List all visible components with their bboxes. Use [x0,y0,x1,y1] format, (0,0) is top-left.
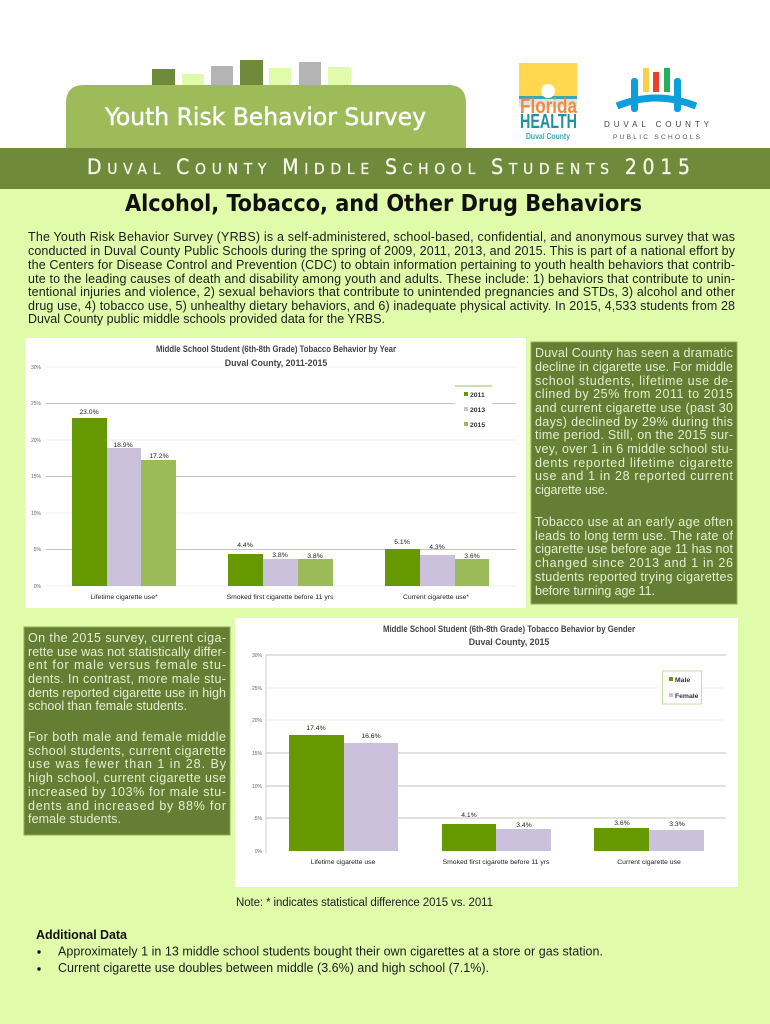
chart: tobacco behavior by gender: 10% [252,784,263,790]
intro paragraph [28,230,736,326]
chart: tobacco behavior by gender: Middle School Student (6th-8th Grade) Tobacco Behavior by Gender [383,624,636,634]
chart: tobacco behavior by year: 17.2% [149,453,169,460]
chart: tobacco behavior by gender: 0% [255,849,263,855]
chart: tobacco behavior by gender [235,618,738,887]
panel: male versus female: school than female students. [28,699,187,713]
main heading: Alcohol, Tobacco, and Other Drug Behaviors [125,189,642,217]
logo: Duval County Public Schools [604,68,710,141]
panel: decline in cigarette use: changed since 2013 and 1 in 26 [535,556,733,570]
chart: tobacco behavior by year: 2013 [470,407,485,414]
panel: decline in cigarette use: before turning age 11. [535,584,655,598]
chart: tobacco behavior by gender: 3.4% [516,822,532,829]
panel: decline in cigarette use: students reported trying cigarettes [535,570,733,584]
panel: decline in cigarette use: Duval County has seen a dramatic [535,346,733,360]
chart: tobacco behavior by gender: Duval County, 2015 [469,637,549,647]
panel: decline in cigarette use: school students, lifetime use de- [535,374,733,388]
chart: tobacco behavior by year: 15% [31,474,42,480]
chart: tobacco behavior by year: Duval County, 2011-2015 [225,358,327,368]
logo: Duval County Public Schools: DUVAL COUNTY [604,120,710,129]
chart: tobacco behavior by year: 3.6% [464,553,480,560]
panel: male versus female: rette use was not statistically differ- [28,645,226,659]
chart: tobacco behavior by year: 20% [31,438,42,444]
chart: tobacco behavior by year: Lifetime cigarette use* [90,594,158,601]
survey title tab: Youth Risk Behavior Survey [104,103,426,131]
chart: tobacco behavior by year: 5.1% [394,539,410,546]
chart: tobacco behavior by year: 10% [31,511,42,517]
chart: tobacco behavior by year: 5% [34,547,42,553]
panel: male versus female [24,627,230,835]
chart: tobacco behavior by gender: Smoked first cigarette before 11 yrs [443,859,550,866]
intro paragraph: Duval County public middle schools provided data for the YRBS. [28,312,385,326]
additional data: Additional Data [36,928,128,942]
banner: Duval County Middle School Students 2015 [0,148,770,189]
panel: decline in cigarette use: decline in cigarette use. For middle [535,360,733,374]
intro paragraph: tentional injuries and violence, 2) sexual behaviors that contribute to unintended pregnancies and STDs, 3) alcohol and other [28,285,735,299]
chart: tobacco behavior by gender: 3.6% [614,820,630,827]
panel: decline in cigarette use: and current cigarette use (past 30 [535,401,733,415]
additional data [36,928,603,975]
chart: tobacco behavior by year: Current cigarette use* [403,594,469,601]
chart: tobacco behavior by gender: 20% [252,718,263,724]
panel: male versus female: dents reported cigarette use in high [28,686,226,700]
panel: decline in cigarette use: Tobacco use at an early age often [535,515,733,529]
additional data: Current cigarette use doubles between middle (3.6%) and high school (7.1%). [58,961,489,975]
chart: tobacco behavior by gender: 4.1% [461,812,477,819]
additional data: Approximately 1 in 13 middle school students bought their own cigarettes at a store or gas station. [58,944,603,958]
chart: tobacco behavior by gender: 16.6% [361,733,381,740]
panel: decline in cigarette use: days) declined by 29% during this [535,415,733,429]
panel: male versus female: dents and increased by 88% for [28,799,226,813]
chart: tobacco behavior by year: Middle School Student (6th-8th Grade) Tobacco Behavior by Year [156,344,397,354]
chart: tobacco behavior by gender: 15% [252,751,263,757]
chart: tobacco behavior by gender: Female [675,693,699,700]
chart: tobacco behavior by year: 2011 [470,392,485,399]
panel: male versus female: school students, current cigarette [28,744,226,758]
logo: Florida Health Duval County [519,63,577,141]
chart: tobacco behavior by year: 18.9% [113,442,133,449]
panel: male versus female: increased by 103% for male stu- [28,785,226,799]
logo: Florida Health Duval County: Florida [520,95,577,118]
chart: tobacco behavior by gender: 17.4% [306,725,326,732]
chart: tobacco behavior by year: 2015 [470,422,485,429]
chart: tobacco behavior by gender: Lifetime cigarette use [311,859,376,866]
panel: decline in cigarette use: leads to long term use. The rate of [535,529,734,543]
chart: tobacco behavior by year: 4.3% [429,544,445,551]
chart: tobacco behavior by gender: Current cigarette use [617,859,681,866]
panel: male versus female: use was fewer than 1 in 28. By [28,757,227,771]
panel: decline in cigarette use: cigarette use before age 11 has not [535,542,734,556]
panel: decline in cigarette use [531,342,737,604]
chart: tobacco behavior by gender: 3.3% [669,821,685,828]
intro paragraph: ute to the leading causes of death and disability among youth and adults. These include: 1) behaviors that contribute to unin- [28,272,735,286]
panel: male versus female: high school, current cigarette use [28,771,226,785]
panel: decline in cigarette use: time period. Still, on the 2015 sur- [535,428,733,442]
logo: Florida Health Duval County: Duval County [526,132,570,141]
chart: tobacco behavior by year: Smoked first cigarette before 11 yrs [227,594,334,601]
panel: decline in cigarette use: clined by 25% from 2011 to 2015 [535,387,733,401]
panel: male versus female: On the 2015 survey, current ciga- [28,631,226,645]
logo: Florida Health Duval County: HEALTH [520,111,577,133]
chart: tobacco behavior by year: 30% [31,365,42,371]
intro paragraph: the Centers for Disease Control and Prevention (CDC) to obtain information pertaining to youth health behaviors that contrib- [28,258,735,272]
panel: decline in cigarette use: use and 1 in 28 reported current [535,469,734,483]
chart: tobacco behavior by year: 3.8% [272,552,288,559]
panel: male versus female: For both male and female middle [28,730,226,744]
panel: male versus female: ent for male versus female stu- [28,658,226,672]
panel: decline in cigarette use: dents reported lifetime cigarette [535,456,733,470]
survey title tab [66,85,466,148]
panel: male versus female: dents. In contrast, more male stu- [28,672,226,686]
logo: Duval County Public Schools: PUBLIC SCHOOLS [613,134,701,141]
panel: decline in cigarette use: vey, over 1 in 6 middle school stu- [535,442,733,456]
chart: tobacco behavior by gender: 30% [252,653,263,659]
intro paragraph: conducted in Duval County Public Schools during the spring of 2009, 2011, 2013, and 2015. This is part of a national effort by [28,244,736,258]
panel: male versus female: female students. [28,812,121,826]
chart: tobacco behavior by year: 23.0% [79,409,99,416]
chart: tobacco behavior by year: 25% [31,401,42,407]
chart: tobacco behavior by year: 4.4% [237,542,253,549]
intro paragraph: The Youth Risk Behavior Survey (YRBS) is a self-administered, school-based, confidential, and anonymous survey that was [28,230,735,244]
chart: tobacco behavior by gender: 5% [255,816,263,822]
chart: tobacco behavior by year: 3.8% [307,553,323,560]
header decorative bars [152,60,351,85]
banner: Duval County Middle School Students 2015: D UVAL C OUNTY M IDDLE S CHOOL S TUDENTS 2015 [87,155,690,179]
panel: decline in cigarette use: cigarette use. [535,483,608,497]
chart: tobacco behavior by gender: Male [675,677,690,684]
statistical note: Note: * indicates statistical difference 2015 vs. 2011 [236,897,493,909]
intro paragraph: drug use, 4) tobacco use, 5) unhealthy dietary behaviors, and 6) inadequate physical activity. In 2015, 4,533 students from 28 [28,299,735,313]
chart: tobacco behavior by year: 0% [34,584,42,590]
chart: tobacco behavior by year [25,338,526,608]
chart: tobacco behavior by gender: 25% [252,686,263,692]
